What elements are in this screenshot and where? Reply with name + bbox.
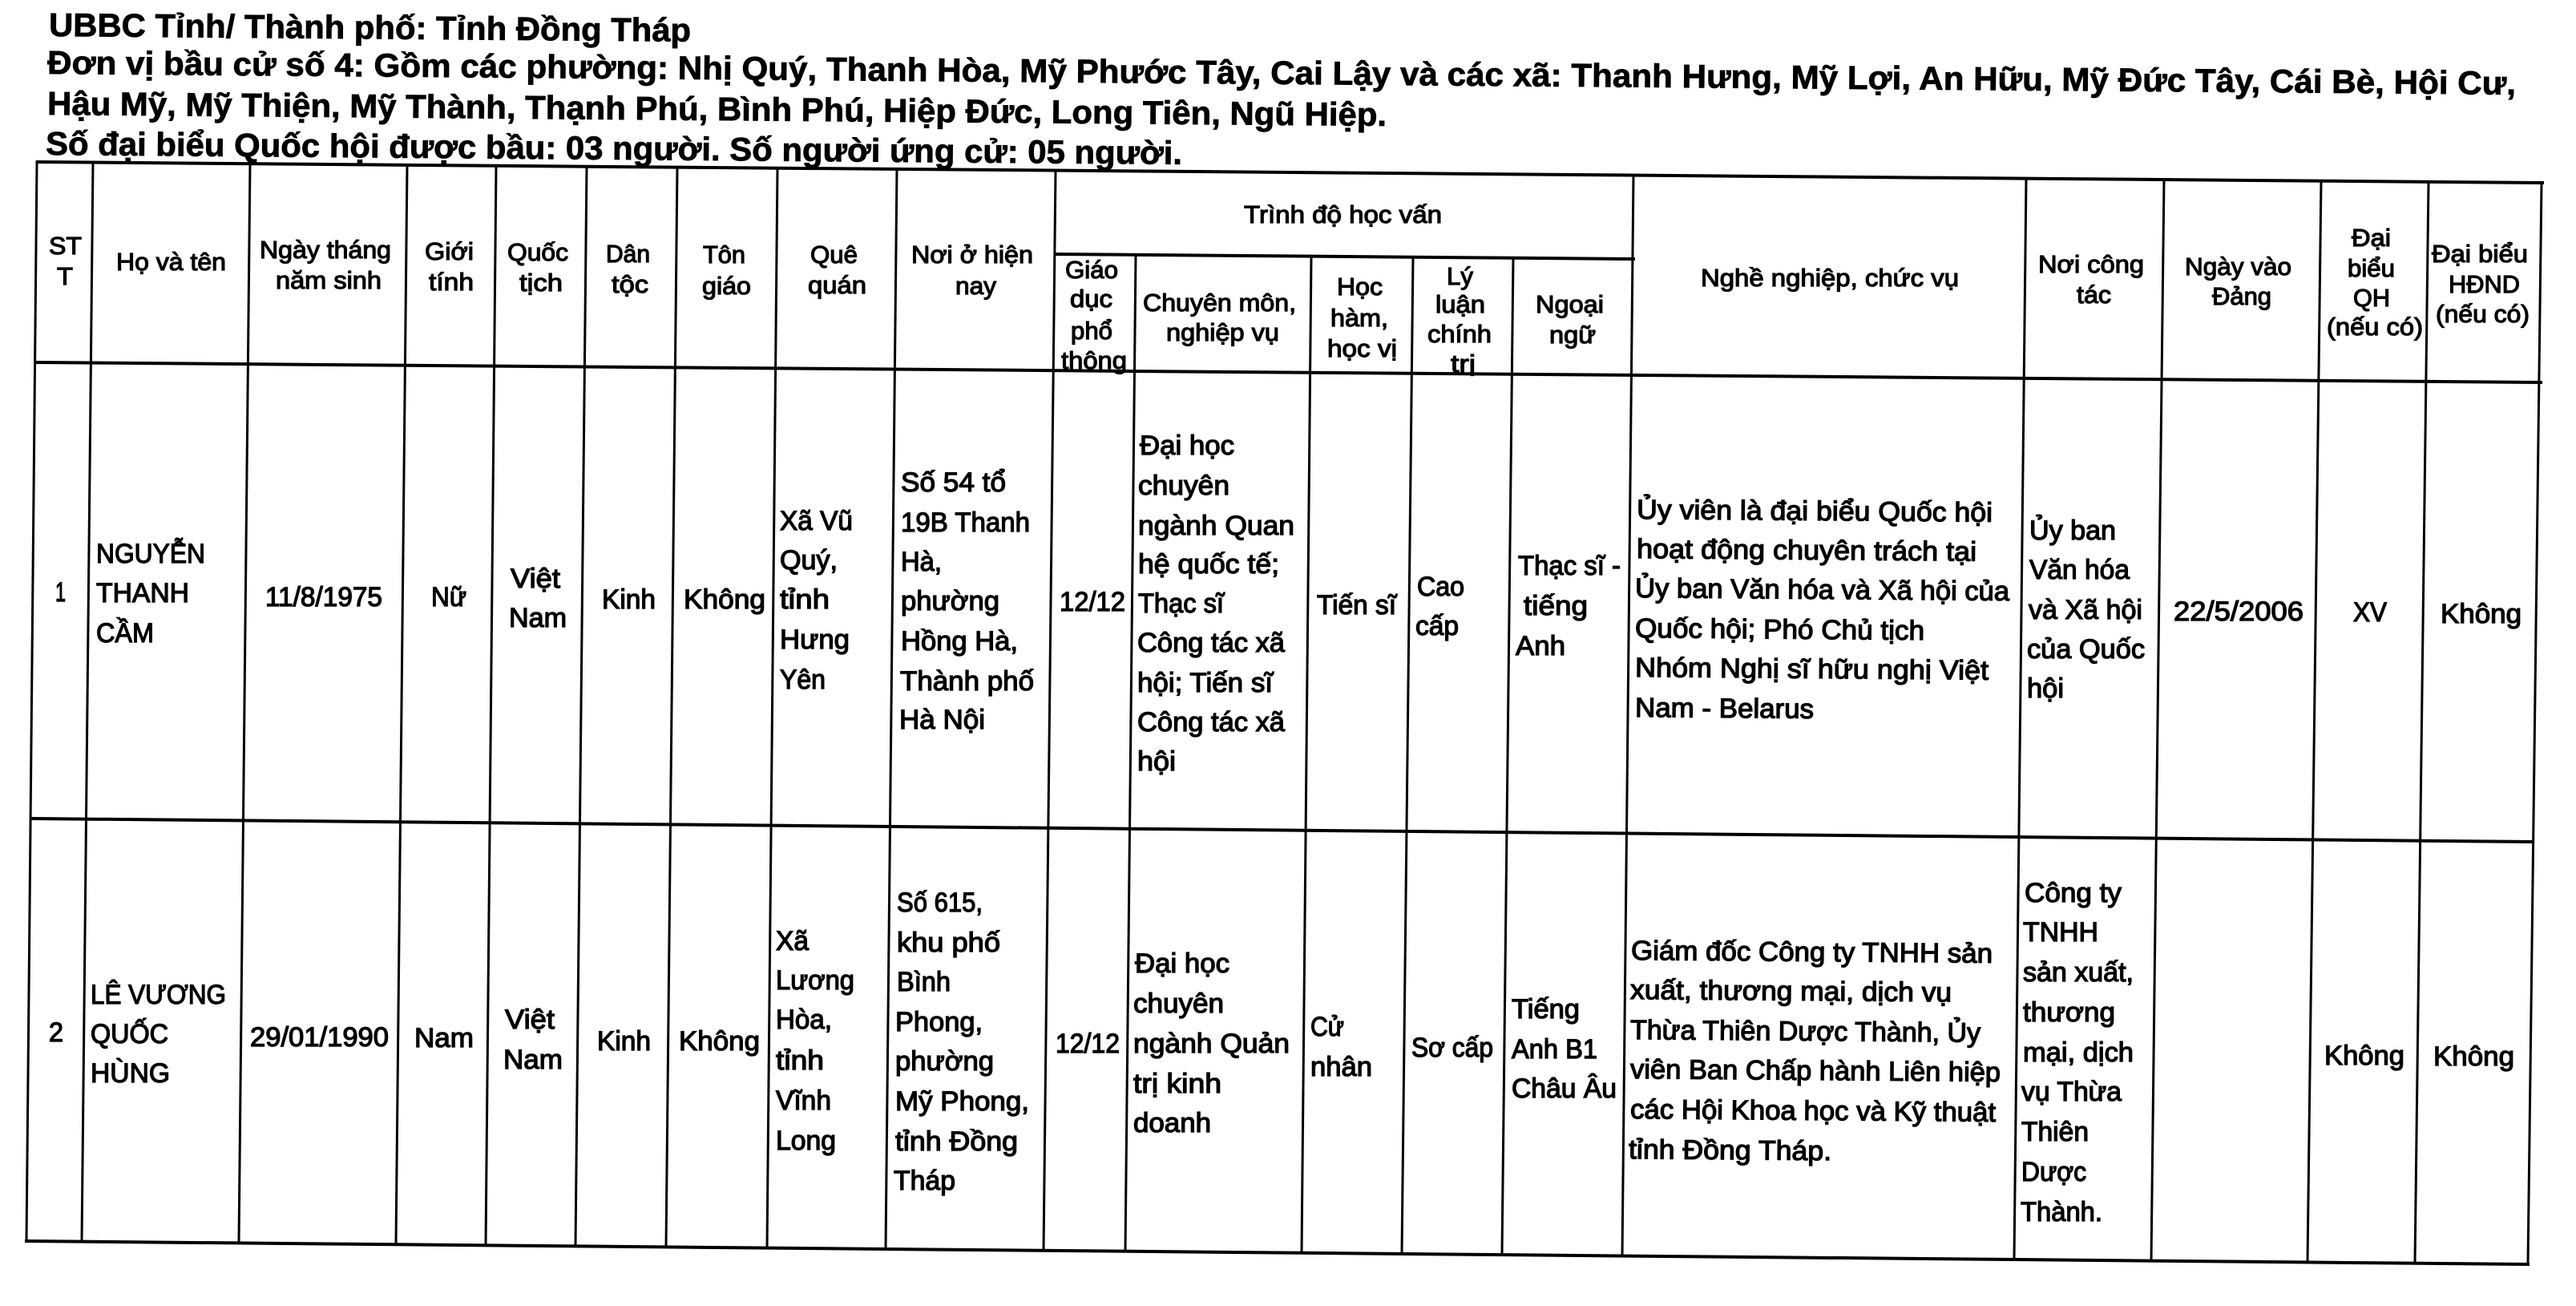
specialization: ngành Quản <box>1133 1029 1290 1059</box>
header: national assembly delegate: QH <box>2353 284 2390 312</box>
workplace: Dược <box>2021 1157 2086 1187</box>
occupation: Ủy ban Văn hóa và Xã hội của <box>1635 573 2009 607</box>
residence: phường <box>901 586 999 617</box>
foreign language: Tiếng <box>1512 994 1580 1025</box>
workplace <box>2021 878 2134 1227</box>
residence: khu phố <box>897 928 1000 958</box>
residence: tỉnh Đồng <box>895 1126 1018 1157</box>
residence: Hà Nội <box>899 705 985 735</box>
occupation <box>1635 495 2009 725</box>
academic title: nhân <box>1310 1052 1372 1082</box>
header: current residence: Nơi ở hiện <box>911 241 1033 269</box>
header: political theory: Lý <box>1447 262 1473 290</box>
specialization: Công tác xã <box>1137 628 1285 658</box>
header: national assembly delegate: biểu <box>2348 254 2395 282</box>
residence <box>894 888 1029 1196</box>
workplace: Thành. <box>2021 1197 2102 1227</box>
name: HÙNG <box>91 1058 170 1089</box>
specialization: hội; Tiến sĩ <box>1137 668 1274 698</box>
header: general education: phổ <box>1071 317 1112 345</box>
heading: electoral unit line 2: Hậu Mỹ, Mỹ Thiện, Mỹ Thành, Thạnh Phú, Bình Phú, Hiệp Đức, Long Tiên, Ngũ Hiệp. <box>47 85 1387 133</box>
header: general education: thông <box>1061 346 1127 374</box>
residence: Số 54 tổ <box>901 467 1006 498</box>
header: people's council delegate <box>2432 240 2530 328</box>
workplace <box>2027 516 2145 704</box>
header: people's council delegate: HĐND <box>2449 270 2520 298</box>
religion: Không <box>679 1026 760 1057</box>
national assembly term: Không <box>2324 1041 2404 1071</box>
residence: Mỹ Phong, <box>895 1086 1029 1117</box>
header: hometown <box>808 241 866 299</box>
title: provincial committee: UBBC Tỉnh/ Thành phố: Tỉnh Đồng Tháp <box>49 6 691 49</box>
hometown: tỉnh <box>776 1045 824 1076</box>
hometown: Yên <box>780 665 826 695</box>
political theory <box>1415 572 1464 641</box>
residence: Hà, <box>901 547 942 577</box>
header: national assembly delegate: (nếu có) <box>2327 313 2423 341</box>
occupation: Nhóm Nghị sĩ hữu nghị Việt <box>1635 653 1989 686</box>
header: STT <box>49 232 82 290</box>
workplace: Văn hóa <box>2029 555 2130 585</box>
header: specialization <box>1143 289 1296 346</box>
workplace: của Quốc <box>2027 634 2145 665</box>
header: foreign language <box>1536 290 1604 349</box>
residence: 19B Thanh <box>901 507 1030 538</box>
workplace: và Xã hội <box>2029 595 2142 625</box>
header: STT: ST <box>49 232 82 260</box>
row 2: Lê Vương Quốc Hùng <box>49 878 2514 1227</box>
occupation: Nam - Belarus <box>1635 693 1814 725</box>
foreign language <box>1512 994 1617 1104</box>
occupation: tỉnh Đồng Tháp. <box>1629 1134 1831 1167</box>
nationality: Việt <box>505 1005 555 1035</box>
foreign language: Châu Âu <box>1512 1074 1617 1104</box>
occupation: xuất, thương mại, dịch vụ <box>1630 975 1952 1008</box>
header: academic title <box>1327 273 1397 362</box>
nationality: Việt <box>511 564 561 594</box>
workplace: sản xuất, <box>2023 957 2134 988</box>
people's council: Không <box>2433 1041 2514 1072</box>
heading: number of delegates: Số đại biểu Quốc hội được bầu: 03 người. Số người ứng cử: 05 người. <box>46 125 1182 172</box>
occupation: viên Ban Chấp hành Liên hiệp <box>1630 1054 2001 1088</box>
header: STT: T <box>57 262 73 290</box>
name: QUỐC <box>91 1018 168 1049</box>
header: national assembly delegate <box>2327 224 2423 341</box>
header: workplace: Nơi công <box>2038 250 2144 278</box>
hometown: tỉnh <box>780 584 830 615</box>
gender: Nam <box>414 1023 474 1053</box>
header: gender: tính <box>429 268 474 296</box>
workplace: TNHH <box>2023 917 2098 948</box>
header: religion <box>702 241 751 300</box>
hometown <box>776 926 854 1156</box>
general education: 12/12 <box>1056 1029 1120 1059</box>
foreign language: Anh B1 <box>1512 1034 1597 1065</box>
title block <box>46 6 2516 172</box>
header: general education: dục <box>1070 285 1112 313</box>
specialization: hệ quốc tế; <box>1138 549 1279 580</box>
specialization <box>1137 431 1294 777</box>
header: date of birth: năm sinh <box>276 266 382 294</box>
workplace: hội <box>2027 673 2064 704</box>
residence <box>899 467 1034 735</box>
header: workplace: tác <box>2077 281 2111 309</box>
residence: Bình <box>897 967 951 997</box>
header: general education: Giáo <box>1065 256 1118 284</box>
heading: electoral unit line 1: Đơn vị bầu cử số 4: Gồm các phường: Nhị Quý, Thanh Hòa, Mỹ Phước Tây, Cai Lậy và các xã: Thanh Hưng, Mỹ Lợi, An Hữu, Mỹ Đức Tây, Cái Bè, Hội Cư, <box>47 44 2516 102</box>
header: ethnicity <box>606 240 650 298</box>
hometown: Hòa, <box>776 1005 832 1035</box>
header: religion: Tôn <box>703 241 745 269</box>
academic title: Cử <box>1310 1012 1344 1042</box>
header: nationality: tịch <box>519 269 563 297</box>
name: THANH <box>96 578 189 609</box>
workplace: thương <box>2023 997 2115 1028</box>
general education: 12/12 <box>1060 587 1125 617</box>
header: academic title: hàm, <box>1330 304 1388 332</box>
header: nationality <box>507 238 568 297</box>
residence: Thành phố <box>900 666 1034 697</box>
specialization: Đại học <box>1135 948 1229 979</box>
occupation: hoạt động chuyên trách tại <box>1637 534 1976 568</box>
hometown: Quý, <box>780 545 838 576</box>
hometown: Long <box>776 1126 836 1156</box>
specialization: chuyên <box>1133 989 1224 1019</box>
header: party join date <box>2185 253 2291 310</box>
occupation: các Hội Khoa học và Kỹ thuật <box>1630 1094 1997 1128</box>
header: ethnicity: Dân <box>606 240 650 268</box>
header: date of birth <box>260 236 391 294</box>
workplace: Công ty <box>2025 878 2122 908</box>
workplace: vụ Thừa <box>2021 1077 2122 1107</box>
foreign language: tiếng <box>1524 591 1588 621</box>
nationality: Nam <box>509 603 567 633</box>
gender: Nữ <box>431 582 466 613</box>
header: gender <box>425 237 474 296</box>
header: national assembly delegate: Đại <box>2352 224 2391 252</box>
specialization: trị kinh <box>1133 1069 1221 1099</box>
header: people's council delegate: (nếu có) <box>2436 300 2530 328</box>
row 1: Nguyễn Thanh Cầm <box>55 431 2521 777</box>
header: occupation: Nghề nghiệp, chức vụ <box>1701 264 1959 292</box>
header: current residence <box>911 241 1033 300</box>
national assembly term: XV <box>2353 597 2387 628</box>
header: hometown: quán <box>808 271 866 299</box>
residence: Hồng Hà, <box>901 626 1018 657</box>
political theory: cấp <box>1415 611 1459 641</box>
header: hometown: Quê <box>810 241 858 269</box>
academic title <box>1310 1012 1372 1082</box>
foreign language: Anh <box>1516 631 1565 661</box>
header: foreign language: ngữ <box>1549 321 1596 349</box>
header: general education <box>1061 256 1127 374</box>
table header row <box>49 200 2530 378</box>
header: people's council delegate: Đại biểu <box>2432 240 2528 268</box>
header: specialization: nghiệp vụ <box>1166 318 1279 346</box>
hometown <box>780 506 853 695</box>
header: specialization: Chuyên môn, <box>1143 289 1296 317</box>
name: LÊ VƯƠNG <box>91 980 226 1010</box>
specialization: Thạc sĩ <box>1138 588 1225 619</box>
occupation: Ủy viên là đại biểu Quốc hội <box>1637 495 1993 528</box>
header: religion: giáo <box>702 272 751 300</box>
workplace: Ủy ban <box>2029 516 2116 546</box>
header: nationality: Quốc <box>507 238 568 266</box>
occupation: Giám đốc Công ty TNHH sản <box>1631 936 1993 969</box>
name <box>96 539 205 649</box>
number 1: 1 <box>55 577 66 608</box>
hometown: Xã Vũ <box>780 506 853 536</box>
nationality <box>503 1005 563 1075</box>
ethnicity: Kinh <box>602 584 656 615</box>
hometown: Hưng <box>780 625 850 655</box>
occupation <box>1629 936 2001 1167</box>
specialization <box>1133 948 1290 1138</box>
hometown: Xã <box>776 926 809 956</box>
header: workplace <box>2038 250 2144 309</box>
header: academic title: học vị <box>1327 334 1397 362</box>
political theory: Cao <box>1417 572 1464 602</box>
header: full name: Họ và tên <box>116 248 226 276</box>
workplace: mại, dịch <box>2023 1037 2134 1068</box>
header: academic title: Học <box>1337 273 1383 301</box>
specialization: chuyên <box>1138 471 1229 501</box>
workplace: Thiên <box>2021 1117 2089 1147</box>
religion: Không <box>684 584 765 615</box>
political theory: Sơ cấp <box>1411 1033 1493 1063</box>
header: ethnicity: tộc <box>612 270 648 298</box>
occupation: Thừa Thiên Dược Thành, Ủy <box>1630 1015 1980 1049</box>
hometown: Vĩnh <box>776 1086 831 1116</box>
header: political theory <box>1427 262 1492 378</box>
residence: phường <box>895 1046 994 1077</box>
ethnicity: Kinh <box>597 1026 651 1057</box>
residence: Số 615, <box>897 888 983 918</box>
header: gender: Giới <box>425 237 474 265</box>
number 2: 2 <box>49 1017 63 1048</box>
occupation: Quốc hội; Phó Chủ tịch <box>1635 613 1924 646</box>
specialization: Đại học <box>1140 431 1234 461</box>
nationality <box>509 564 567 633</box>
hometown: Lương <box>776 965 854 996</box>
residence: Tháp <box>894 1166 955 1196</box>
name: CẦM <box>96 618 154 649</box>
header: foreign language: Ngoại <box>1536 290 1604 318</box>
specialization: Công tác xã <box>1137 707 1285 738</box>
header: current residence: nay <box>955 272 997 300</box>
nationality: Nam <box>503 1045 563 1075</box>
header: political theory: trị <box>1451 350 1476 378</box>
residence: Phong, <box>895 1007 983 1037</box>
specialization: ngành Quan <box>1138 511 1294 541</box>
header: education group: Trình độ học vấn <box>1244 200 1442 228</box>
party join date: 22/5/2006 <box>2174 596 2303 627</box>
specialization: doanh <box>1133 1108 1211 1138</box>
birth date: 11/8/1975 <box>265 582 382 613</box>
foreign language: Thạc sĩ - <box>1518 551 1621 581</box>
name: NGUYỄN <box>96 539 205 569</box>
header: party join date: Ngày vào <box>2185 253 2291 281</box>
foreign language <box>1516 551 1621 661</box>
birth date: 29/01/1990 <box>250 1022 389 1053</box>
header: political theory: luận <box>1435 290 1485 318</box>
header: party join date: Đảng <box>2212 282 2271 310</box>
name <box>91 980 226 1089</box>
header: political theory: chính <box>1427 320 1492 348</box>
specialization: hội <box>1137 746 1176 777</box>
people's council: Không <box>2441 599 2521 629</box>
header: date of birth: Ngày tháng <box>260 236 391 264</box>
academic title: Tiến sĩ <box>1317 590 1398 621</box>
